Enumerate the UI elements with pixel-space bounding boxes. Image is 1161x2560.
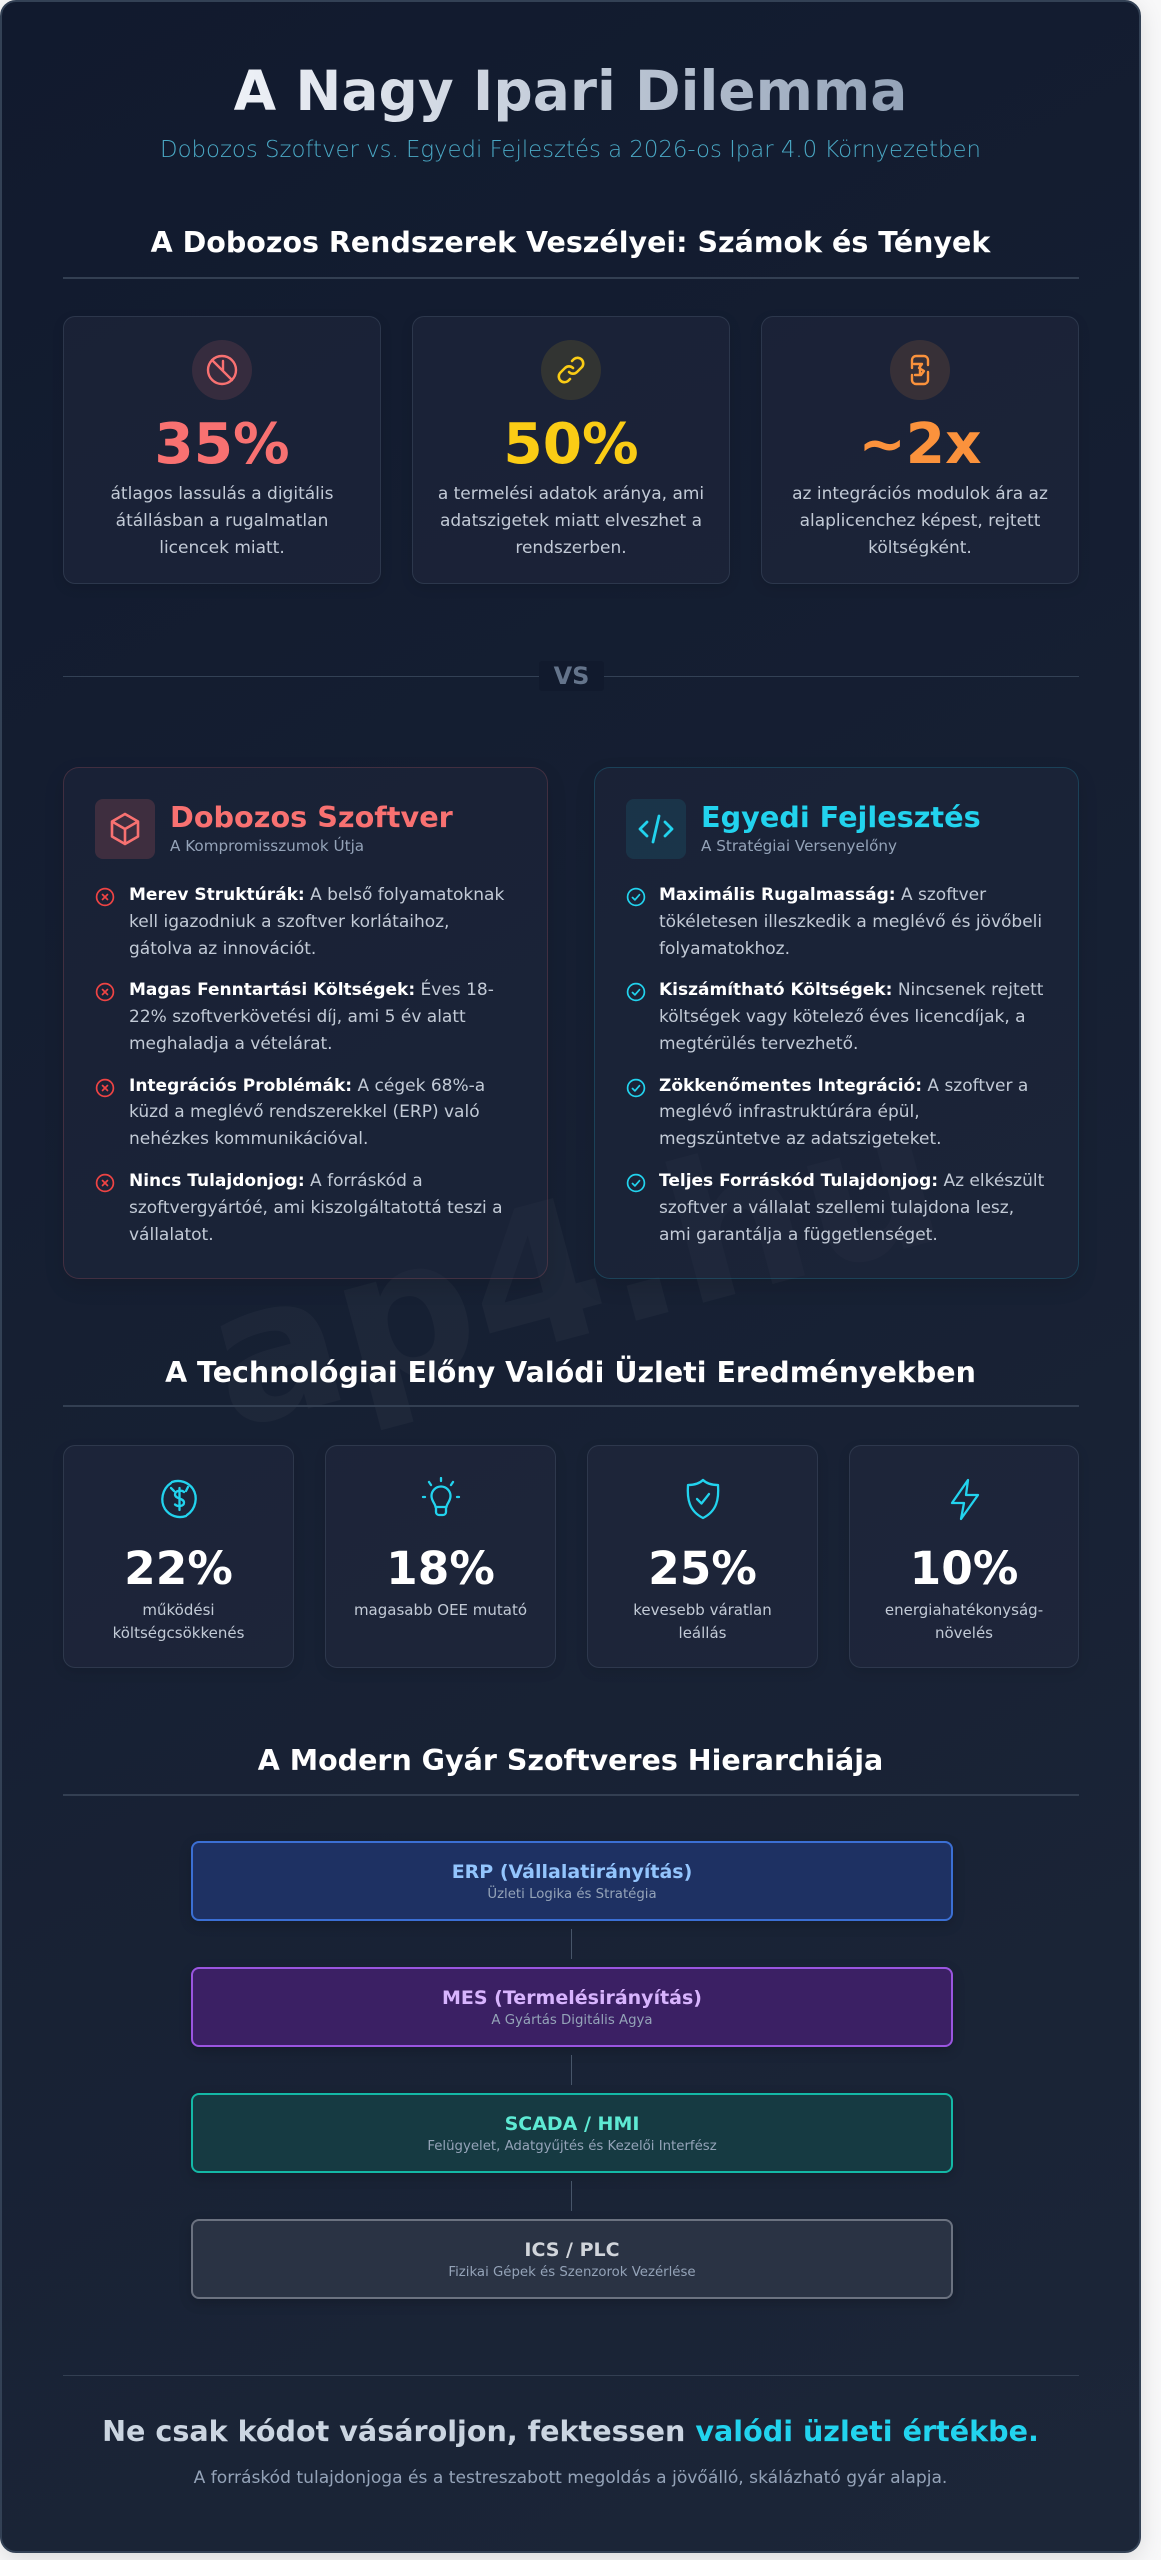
level title: SCADA / HMI bbox=[505, 2113, 639, 2135]
list item: megszüntetve az adatszigeteket. bbox=[659, 1129, 942, 1149]
description bbox=[438, 484, 704, 558]
number: 22% bbox=[124, 1542, 233, 1595]
list item: meglévő infrastruktúrára épül, bbox=[659, 1102, 920, 1122]
list item: szoftvergyártóé, ami kiszolgáltatottá teszi a bbox=[129, 1198, 503, 1218]
level title: MES (Termelésirányítás) bbox=[442, 1987, 702, 2009]
list item: küzd a meglévő rendszerekkel (ERP) való bbox=[129, 1102, 480, 1122]
level description: Felügyelet, Adatgyűjtés és Kezelői Interfész bbox=[427, 2139, 717, 2154]
section heading: hierarchy: A Modern Gyár Szoftveres Hierarchiája bbox=[258, 1744, 883, 1777]
icon: box bbox=[95, 799, 155, 859]
list item: gátolva az innovációt. bbox=[129, 939, 316, 959]
list item: szoftver a vállalat szellemi tulajdona lesz, bbox=[659, 1198, 1014, 1218]
section heading: dangers: A Dobozos Rendszerek Veszélyei: Számok és Tények bbox=[151, 226, 990, 259]
description: az integrációs modulok ára az bbox=[792, 484, 1048, 504]
description: rendszerben. bbox=[515, 538, 627, 558]
result card: 18% bbox=[325, 1445, 556, 1668]
section heading: results: A Technológiai Előny Valódi Üzleti Eredményekben bbox=[165, 1356, 976, 1389]
list item bbox=[129, 885, 504, 959]
description: licencek miatt. bbox=[159, 538, 285, 558]
level title: ERP (Vállalatirányítás) bbox=[452, 1861, 692, 1883]
list item: Zökkenőmentes Integráció: A szoftver a bbox=[659, 1076, 1028, 1096]
description: alaplicenchez képest, rejtett bbox=[800, 511, 1040, 531]
description: átlagos lassulás a digitális bbox=[111, 484, 333, 504]
list item: Kiszámítható Költségek: Nincsenek rejtett bbox=[659, 980, 1043, 1000]
description: adatszigetek miatt elveszhet a bbox=[440, 511, 702, 531]
icon: broken link bbox=[541, 340, 601, 400]
list item: 22% szoftverkövetési díj, ami 5 év alatt bbox=[129, 1007, 466, 1027]
list item: Magas Fenntartási Költségek: Éves 18- bbox=[129, 980, 494, 1000]
result card: 10% bbox=[849, 1445, 1079, 1668]
panel title: Egyedi Fejlesztés bbox=[701, 800, 981, 834]
icon: x bbox=[96, 1174, 114, 1192]
list item: megtérülés tervezhető. bbox=[659, 1034, 858, 1054]
number: 10% bbox=[910, 1542, 1018, 1595]
icon: code bbox=[626, 799, 686, 859]
icon: x bbox=[96, 1078, 114, 1098]
icon: check bbox=[626, 1174, 646, 1192]
list item bbox=[659, 885, 1042, 959]
description: leállás bbox=[679, 1624, 726, 1642]
description: magasabb OEE mutató bbox=[354, 1601, 527, 1619]
icon: check bbox=[626, 888, 646, 906]
icon: light bulb bbox=[422, 1477, 460, 1516]
stat card: 35% bbox=[63, 316, 381, 584]
footer headline: Ne csak kódot vásároljon, fektessen valódi üzleti értékbe. bbox=[102, 2414, 1039, 2448]
list item: Maximális Rugalmasság: A szoftver bbox=[659, 885, 986, 905]
description bbox=[792, 484, 1048, 558]
number: ~2x bbox=[858, 412, 982, 477]
icon: hidden cost bbox=[890, 340, 950, 400]
description: költségként. bbox=[868, 538, 972, 558]
level: MES bbox=[191, 1967, 953, 2047]
description: energiahatékonyság- bbox=[885, 1601, 1043, 1619]
panel: packaged software bbox=[63, 767, 548, 1279]
list item: tökéletesen illeszkedik a meglévő és jövőbeli bbox=[659, 912, 1042, 932]
panel: custom development bbox=[594, 767, 1079, 1279]
description bbox=[111, 484, 333, 558]
description: növelés bbox=[935, 1624, 993, 1642]
footer note: A forráskód tulajdonjoga és a testreszabott megoldás a jövőálló, skálázható gyár alapja. bbox=[194, 2468, 947, 2488]
result card: 22% bbox=[63, 1445, 294, 1668]
list item: költségek vagy kötelező éves licencdíjak, a bbox=[659, 1007, 1026, 1027]
icon: check bbox=[626, 982, 646, 1002]
description: a termelési adatok aránya, ami bbox=[438, 484, 704, 504]
panel subtitle: A Stratégiai Versenyelőny bbox=[701, 837, 897, 855]
list item: meghaladja a vételárat. bbox=[129, 1034, 333, 1054]
list item: Integrációs Problémák: A cégek 68%-a bbox=[129, 1076, 485, 1096]
stat card: 50% bbox=[412, 316, 730, 584]
number: 25% bbox=[648, 1542, 757, 1595]
icon: x bbox=[96, 982, 114, 1002]
level description: Fizikai Gépek és Szenzorok Vezérlése bbox=[448, 2265, 696, 2280]
icon: shield check bbox=[686, 1478, 720, 1520]
icon: check bbox=[626, 1078, 646, 1098]
icon: lightning bbox=[950, 1478, 980, 1520]
watermark: ap4.hu bbox=[184, 1065, 963, 1474]
list item bbox=[659, 980, 1043, 1054]
level title: ICS / PLC bbox=[524, 2239, 620, 2261]
panel subtitle: A Kompromisszumok Útja bbox=[170, 837, 364, 855]
icon: dollar cycle bbox=[161, 1480, 197, 1518]
description: átállásban a rugalmatlan bbox=[116, 511, 328, 531]
description: működési bbox=[142, 1601, 215, 1619]
list item bbox=[659, 1171, 1044, 1245]
list item bbox=[129, 1171, 503, 1245]
list item: Merev Struktúrák: A belső folyamatoknak bbox=[129, 885, 504, 905]
list item bbox=[659, 1076, 1028, 1149]
number: 50% bbox=[503, 412, 639, 477]
number: 35% bbox=[154, 412, 290, 477]
result card: 25% bbox=[587, 1445, 818, 1668]
title: A Nagy Ipari Dilemma bbox=[234, 59, 907, 123]
stat card: ~2x bbox=[761, 316, 1079, 584]
description bbox=[633, 1601, 772, 1642]
number: 18% bbox=[386, 1542, 495, 1595]
panel title: Dobozos Szoftver bbox=[170, 800, 453, 834]
list item: folyamatokhoz. bbox=[659, 939, 790, 959]
description: költségcsökkenés bbox=[113, 1624, 244, 1642]
icon: ban bbox=[192, 340, 252, 400]
description: kevesebb váratlan bbox=[633, 1601, 772, 1619]
level: SCADA bbox=[191, 2093, 953, 2173]
level: ICS bbox=[191, 2219, 953, 2299]
level description: Üzleti Logika és Stratégia bbox=[487, 1887, 657, 1902]
subtitle: Dobozos Szoftver vs. Egyedi Fejlesztés a 2026-os Ipar 4.0 Környezetben bbox=[160, 137, 981, 163]
list item: Teljes Forráskód Tulajdonjog: Az elkészült bbox=[659, 1171, 1044, 1191]
icon: x bbox=[96, 888, 114, 906]
description bbox=[113, 1601, 244, 1642]
list item bbox=[129, 1076, 485, 1149]
list item: ami garantálja a függetlenséget. bbox=[659, 1225, 938, 1245]
list item: Nincs Tulajdonjog: A forráskód a bbox=[129, 1171, 423, 1191]
list item bbox=[129, 979, 494, 1054]
description bbox=[885, 1601, 1043, 1642]
list item: nehézkes kommunikációval. bbox=[129, 1129, 368, 1149]
list item: kell igazodniuk a szoftver korlátaihoz, bbox=[129, 912, 449, 932]
vs badge bbox=[539, 661, 604, 691]
level description: A Gyártás Digitális Agya bbox=[491, 2013, 653, 2028]
list item: vállalatot. bbox=[129, 1225, 214, 1245]
level: ERP bbox=[191, 1841, 953, 1921]
vs badge: VS bbox=[554, 662, 589, 690]
